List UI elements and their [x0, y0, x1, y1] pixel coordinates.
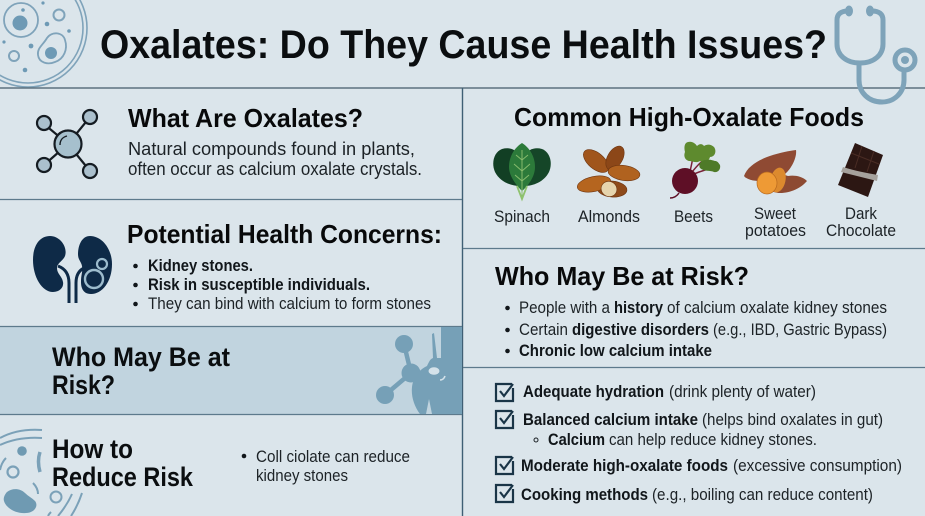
- icon: beet: [670, 142, 720, 198]
- icon: spinach: [493, 143, 551, 199]
- text: spinach label: Spinach: [494, 208, 550, 226]
- panel: potential health concerns: [33, 219, 442, 313]
- icon: almonds: [576, 143, 641, 199]
- heading: what are oxalates: What Are Oxalates?: [128, 103, 363, 133]
- checklist item: moderate high-oxalate foods: [496, 457, 902, 475]
- dividers: [0, 87, 925, 89]
- checklist item: balanced calcium intake: Calcium: [548, 431, 605, 449]
- checklist item: balanced calcium intake: can help reduce kidney stones.: [609, 431, 817, 449]
- heading: how to reduce risk: Reduce Risk: [52, 462, 194, 492]
- icon: molecule and kidney silhouette: [376, 327, 462, 414]
- checklist item: adequate hydration: (drink plenty of water): [669, 383, 816, 401]
- band: who may be at risk: [0, 327, 462, 414]
- heading: potential health concerns: Potential Health Concerns:: [127, 219, 442, 249]
- text: dark chocolate label: Dark: [845, 205, 878, 223]
- list: health concerns: Kidney stones.: [148, 257, 253, 275]
- list: risk groups: history: [614, 299, 664, 317]
- checklist item: cooking methods: [496, 485, 873, 504]
- icon: molecule: [37, 110, 97, 178]
- text: reduce risk bullet: Coll ciolate can reduce: [256, 448, 410, 466]
- list: health concerns: Risk in susceptible individuals.: [148, 276, 370, 294]
- heading: who may be at risk: Risk?: [52, 370, 115, 400]
- text: reduce risk bullet: kidney stones: [256, 467, 348, 485]
- text: reduce risk bullet: [242, 448, 410, 485]
- checklist item: balanced calcium intake: Balanced calcium intake: [523, 411, 698, 429]
- icon: stethoscope: [837, 6, 915, 102]
- checklist item: balanced calcium intake: [496, 411, 883, 449]
- text: oxalates definition: Natural compounds found in plants,: [128, 139, 415, 159]
- text: dark chocolate label: [826, 205, 896, 240]
- checklist item: moderate high-oxalate foods: Moderate high-oxalate foods: [521, 457, 728, 475]
- checklist item: adequate hydration: Adequate hydration: [523, 383, 664, 401]
- text: beets label: Beets: [674, 208, 713, 226]
- list: risk groups: (e.g., IBD, Gastric Bypass): [713, 321, 887, 339]
- icon: kidneys: [33, 236, 112, 303]
- icon: cell background: [0, 430, 82, 516]
- heading: how to reduce risk: How to: [52, 434, 133, 464]
- list: risk groups: [505, 299, 887, 360]
- text: dark chocolate label: Chocolate: [826, 222, 896, 240]
- panel: how to reduce risk checklist: [496, 383, 902, 504]
- heading: who may be at risk: [52, 342, 230, 400]
- list: risk groups: of calcium oxalate kidney stones: [667, 299, 887, 317]
- heading: common high-oxalate foods: Common High-Oxalate Foods: [514, 102, 864, 132]
- heading: who may be at risk: Who May Be at: [52, 342, 230, 372]
- panel: what are oxalates: [37, 103, 422, 179]
- checklist item: cooking methods: Cooking methods: [521, 486, 648, 504]
- panel: common high-oxalate foods: [493, 102, 896, 240]
- checklist item: adequate hydration: [496, 383, 816, 401]
- icon: sweet potatoes: [744, 150, 807, 194]
- text: oxalates definition: often occur as calcium oxalate crystals.: [128, 159, 422, 179]
- text: almonds label: Almonds: [578, 208, 640, 226]
- list: risk groups: Certain: [519, 321, 568, 339]
- title: Oxalates: Do They Cause Health Issues?: [100, 23, 827, 67]
- text: sweet potatoes label: Sweet: [754, 205, 796, 223]
- checklist item: balanced calcium intake: (helps bind oxalates in gut): [702, 411, 883, 429]
- heading: how to reduce risk: [52, 434, 194, 492]
- list: risk groups: digestive disorders: [572, 321, 709, 339]
- icon: petri dish top left: [0, 0, 87, 87]
- checklist item: cooking methods: (e.g., boiling can reduce content): [652, 486, 873, 504]
- list: risk groups: People with a: [519, 299, 611, 317]
- list: health concerns: They can bind with calcium to form stones: [148, 295, 431, 313]
- panel: how to reduce risk (left): [0, 430, 410, 516]
- icon: dark chocolate: [838, 143, 883, 197]
- checklist item: moderate high-oxalate foods: (excessive consumption): [733, 457, 902, 475]
- list: health concerns: [133, 257, 431, 313]
- text: sweet potatoes label: potatoes: [745, 222, 806, 240]
- list: risk groups: Chronic low calcium intake: [519, 342, 712, 360]
- text: oxalates definition: [128, 139, 422, 179]
- heading: who may be at risk right: Who May Be at Risk?: [495, 261, 749, 291]
- panel: who may be at risk (left): [52, 327, 462, 414]
- panel: who may be at risk (right): [495, 261, 887, 360]
- text: sweet potatoes label: [745, 205, 806, 240]
